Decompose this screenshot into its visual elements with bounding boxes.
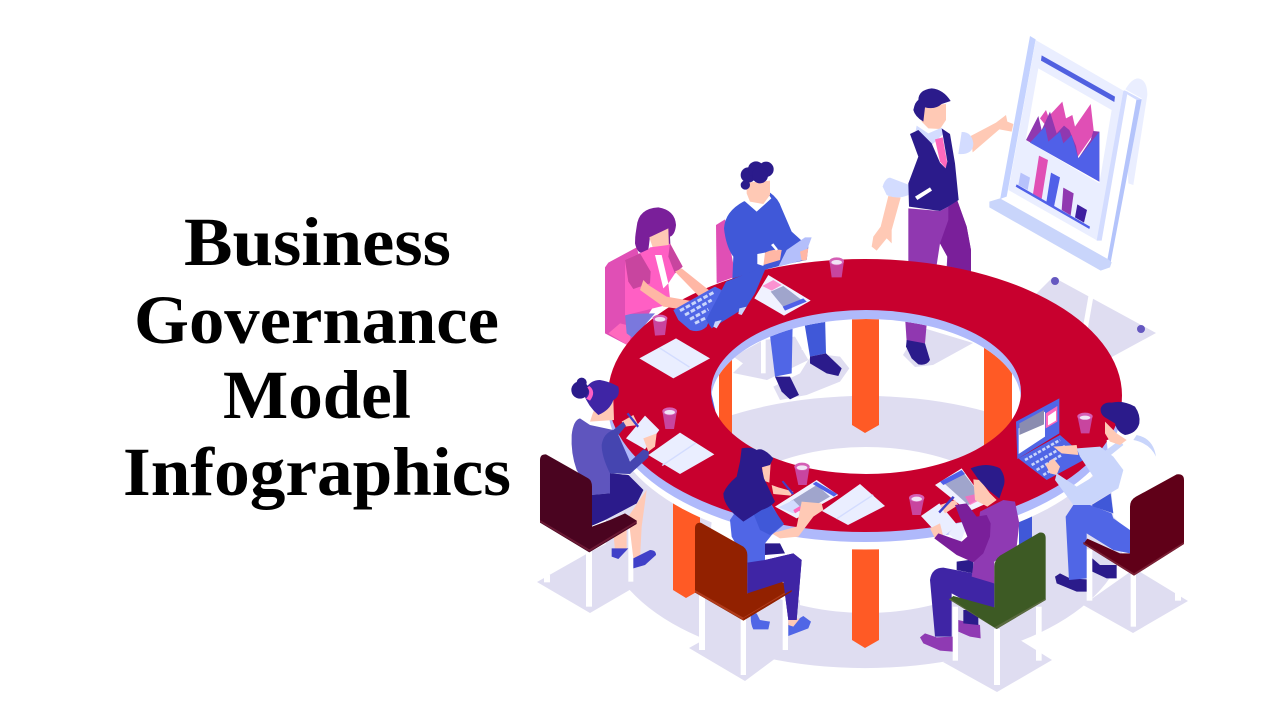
- glass: [909, 497, 924, 515]
- chart panel: [1026, 68, 1112, 183]
- arm: [934, 503, 991, 562]
- held book and hand: [921, 503, 957, 538]
- left seated woman with bun: [540, 378, 714, 607]
- glass: [829, 261, 844, 277]
- title: Model: [223, 357, 411, 433]
- shoes: [788, 616, 811, 636]
- collar: [1133, 435, 1156, 457]
- skirt: [592, 473, 643, 526]
- top: [572, 418, 613, 495]
- shoes and shins: [613, 530, 627, 550]
- right seated man with laptop: [1016, 398, 1184, 627]
- maroon chair: [1083, 474, 1184, 576]
- table white underside: [609, 278, 1121, 550]
- seated man in purple with green chair: [909, 465, 1046, 685]
- title: [123, 204, 511, 510]
- board glow: [1125, 78, 1147, 185]
- seated man head: [743, 192, 771, 212]
- presenter vest: [908, 128, 959, 211]
- notebook: [648, 433, 714, 474]
- board roller: [1097, 91, 1128, 241]
- chair: [695, 523, 792, 621]
- torso: [972, 500, 1019, 583]
- hair and head: [590, 400, 614, 422]
- white back: [1107, 437, 1155, 533]
- inner wall shade: [711, 392, 730, 444]
- table rim: [608, 269, 1122, 542]
- shoes: [1092, 558, 1117, 578]
- held book and hands: [622, 415, 638, 427]
- arms: [772, 485, 793, 496]
- presenter arms: [872, 196, 901, 251]
- doc on table: [935, 468, 987, 512]
- presenter trousers: [908, 201, 971, 272]
- woman legs: [625, 313, 655, 338]
- chair shadow in opening: [733, 337, 808, 380]
- head: [973, 479, 997, 507]
- presenter standing: [872, 88, 1013, 365]
- back table items: [639, 257, 844, 378]
- table top: [608, 259, 1122, 532]
- glass: [662, 411, 677, 429]
- head: [1105, 422, 1127, 445]
- notebook: [822, 484, 885, 525]
- board tray: [989, 198, 1112, 271]
- pink chair back: [716, 219, 735, 283]
- glass: [653, 317, 667, 336]
- man in blue sweater and woman in pink, seated at back: [605, 161, 849, 400]
- pink woman arms: [640, 280, 697, 312]
- board header bar: [1041, 55, 1115, 102]
- title: Governance: [134, 282, 499, 358]
- area chart: [1026, 102, 1099, 182]
- hands: [1053, 445, 1078, 455]
- notebook: [639, 338, 710, 378]
- seated man tablet and hand: [763, 250, 782, 265]
- arm: [1055, 447, 1123, 505]
- presenter head: [922, 104, 946, 129]
- hair: [723, 448, 775, 522]
- title: Business: [184, 204, 451, 280]
- top: [730, 502, 783, 563]
- presentation board: [989, 36, 1147, 271]
- chair legs: [699, 595, 705, 650]
- seated man torso: [724, 193, 808, 279]
- trousers: [765, 543, 785, 555]
- table legs: [673, 315, 1032, 648]
- head: [762, 463, 771, 483]
- presenter shirt collar and tie: [916, 127, 947, 163]
- floor shadows: [537, 277, 1188, 692]
- pink chair left: [605, 247, 653, 346]
- laptop blue: [673, 287, 722, 331]
- woman hair: [635, 207, 676, 253]
- glass: [1077, 416, 1093, 433]
- glass: [794, 466, 810, 485]
- chair legs: [1087, 549, 1092, 601]
- round table: [608, 259, 1122, 550]
- board frame: [1000, 37, 1142, 262]
- front seated woman with long hair: [695, 448, 885, 675]
- laptop keyboard: [1018, 435, 1087, 480]
- trousers: [1066, 505, 1130, 580]
- bar chart: [1016, 156, 1090, 229]
- icon: floor bolts: [1051, 277, 1145, 333]
- chair legs: [953, 607, 958, 661]
- woman shirt: [625, 243, 683, 315]
- laptop screen: [1016, 398, 1059, 459]
- hair: [1101, 402, 1140, 435]
- green chair: [949, 533, 1046, 629]
- trousers: [963, 610, 978, 625]
- document: [775, 480, 838, 518]
- seated man legs: [803, 315, 826, 357]
- chair shadow legs: [544, 575, 550, 582]
- shoes: [958, 620, 981, 638]
- paper sheet: [754, 275, 811, 316]
- sleeve: [602, 422, 649, 474]
- title: Infographics: [123, 434, 511, 510]
- presenter lower legs: [905, 317, 927, 343]
- dark chair: [540, 454, 637, 552]
